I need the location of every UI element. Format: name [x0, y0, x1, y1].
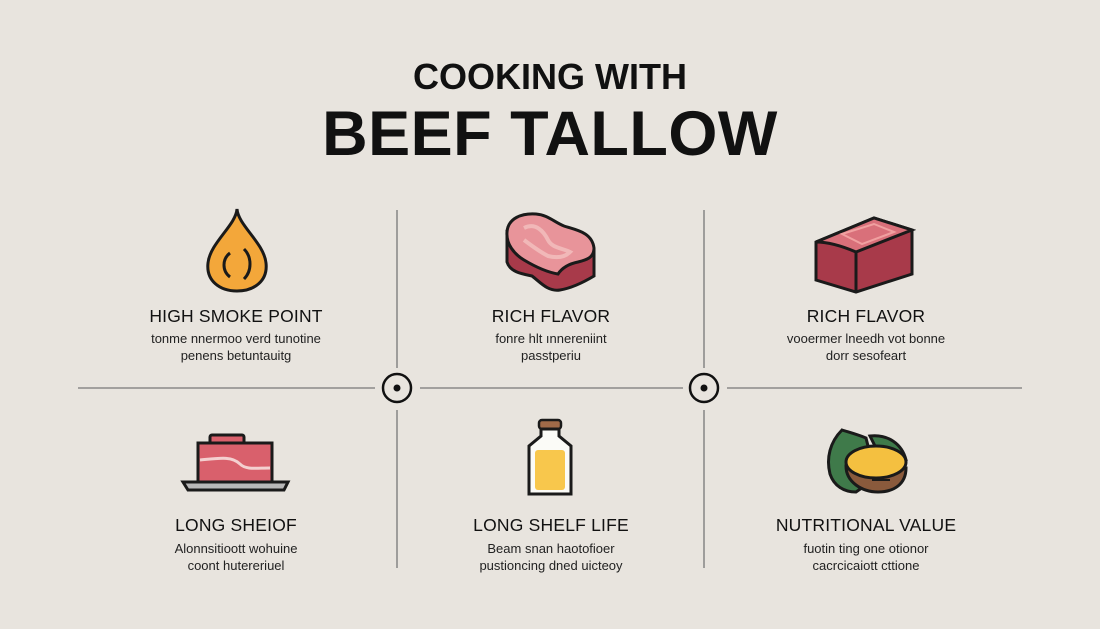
- text: desc 6: fuotin ting one otionor: [803, 541, 929, 556]
- title: BEEF TALLOW: [322, 99, 778, 169]
- icon: block: [814, 216, 916, 294]
- text: desc 5: [479, 541, 623, 573]
- text: desc 3: dorr sesofeart: [826, 348, 906, 363]
- title: COOKING WITH: [413, 56, 687, 97]
- heading: high smoke point: HIGH SMOKE POINT: [149, 306, 323, 326]
- text: desc 4: Alonnsitioott wohuine: [175, 541, 297, 556]
- text: desc 1: penens betuntauitg: [181, 348, 291, 363]
- text: desc 2: [495, 331, 607, 363]
- text: desc 3: vooermer lneedh vot bonne: [787, 331, 945, 346]
- text: desc 6: cacrcicaiott cttione: [813, 558, 919, 573]
- icon: butter dish: [180, 434, 290, 492]
- heading: long sheiof: LONG SHEIOF: [175, 515, 297, 535]
- text: desc 5: Beam snan haotofioer: [487, 541, 615, 556]
- text: desc 3: [787, 331, 945, 363]
- heading: rich flavor 1: RICH FLAVOR: [492, 306, 610, 326]
- text: desc 2: fonre hlt ınnereniint: [495, 331, 607, 346]
- text: desc 6: [803, 541, 929, 573]
- text: desc 1: [151, 331, 321, 363]
- heading: rich flavor 2: RICH FLAVOR: [807, 306, 925, 326]
- heading: nutritional value: NUTRITIONAL VALUE: [776, 515, 956, 535]
- text: desc 5: pustioncing dned uicteoy: [479, 558, 623, 573]
- text: desc 4: coont hutereriuel: [188, 558, 284, 573]
- text: desc 1: tonme nnermoo verd tunotine: [151, 331, 321, 346]
- icon: bottle: [528, 418, 572, 496]
- heading: long shelf life: LONG SHELF LIFE: [473, 515, 629, 535]
- text: desc 4: [174, 541, 297, 573]
- text: desc 2: passtperiu: [521, 348, 581, 363]
- icon: drop: [206, 208, 268, 292]
- title: [322, 56, 778, 169]
- icon: nut: [827, 428, 908, 494]
- icon: steak: [505, 212, 596, 292]
